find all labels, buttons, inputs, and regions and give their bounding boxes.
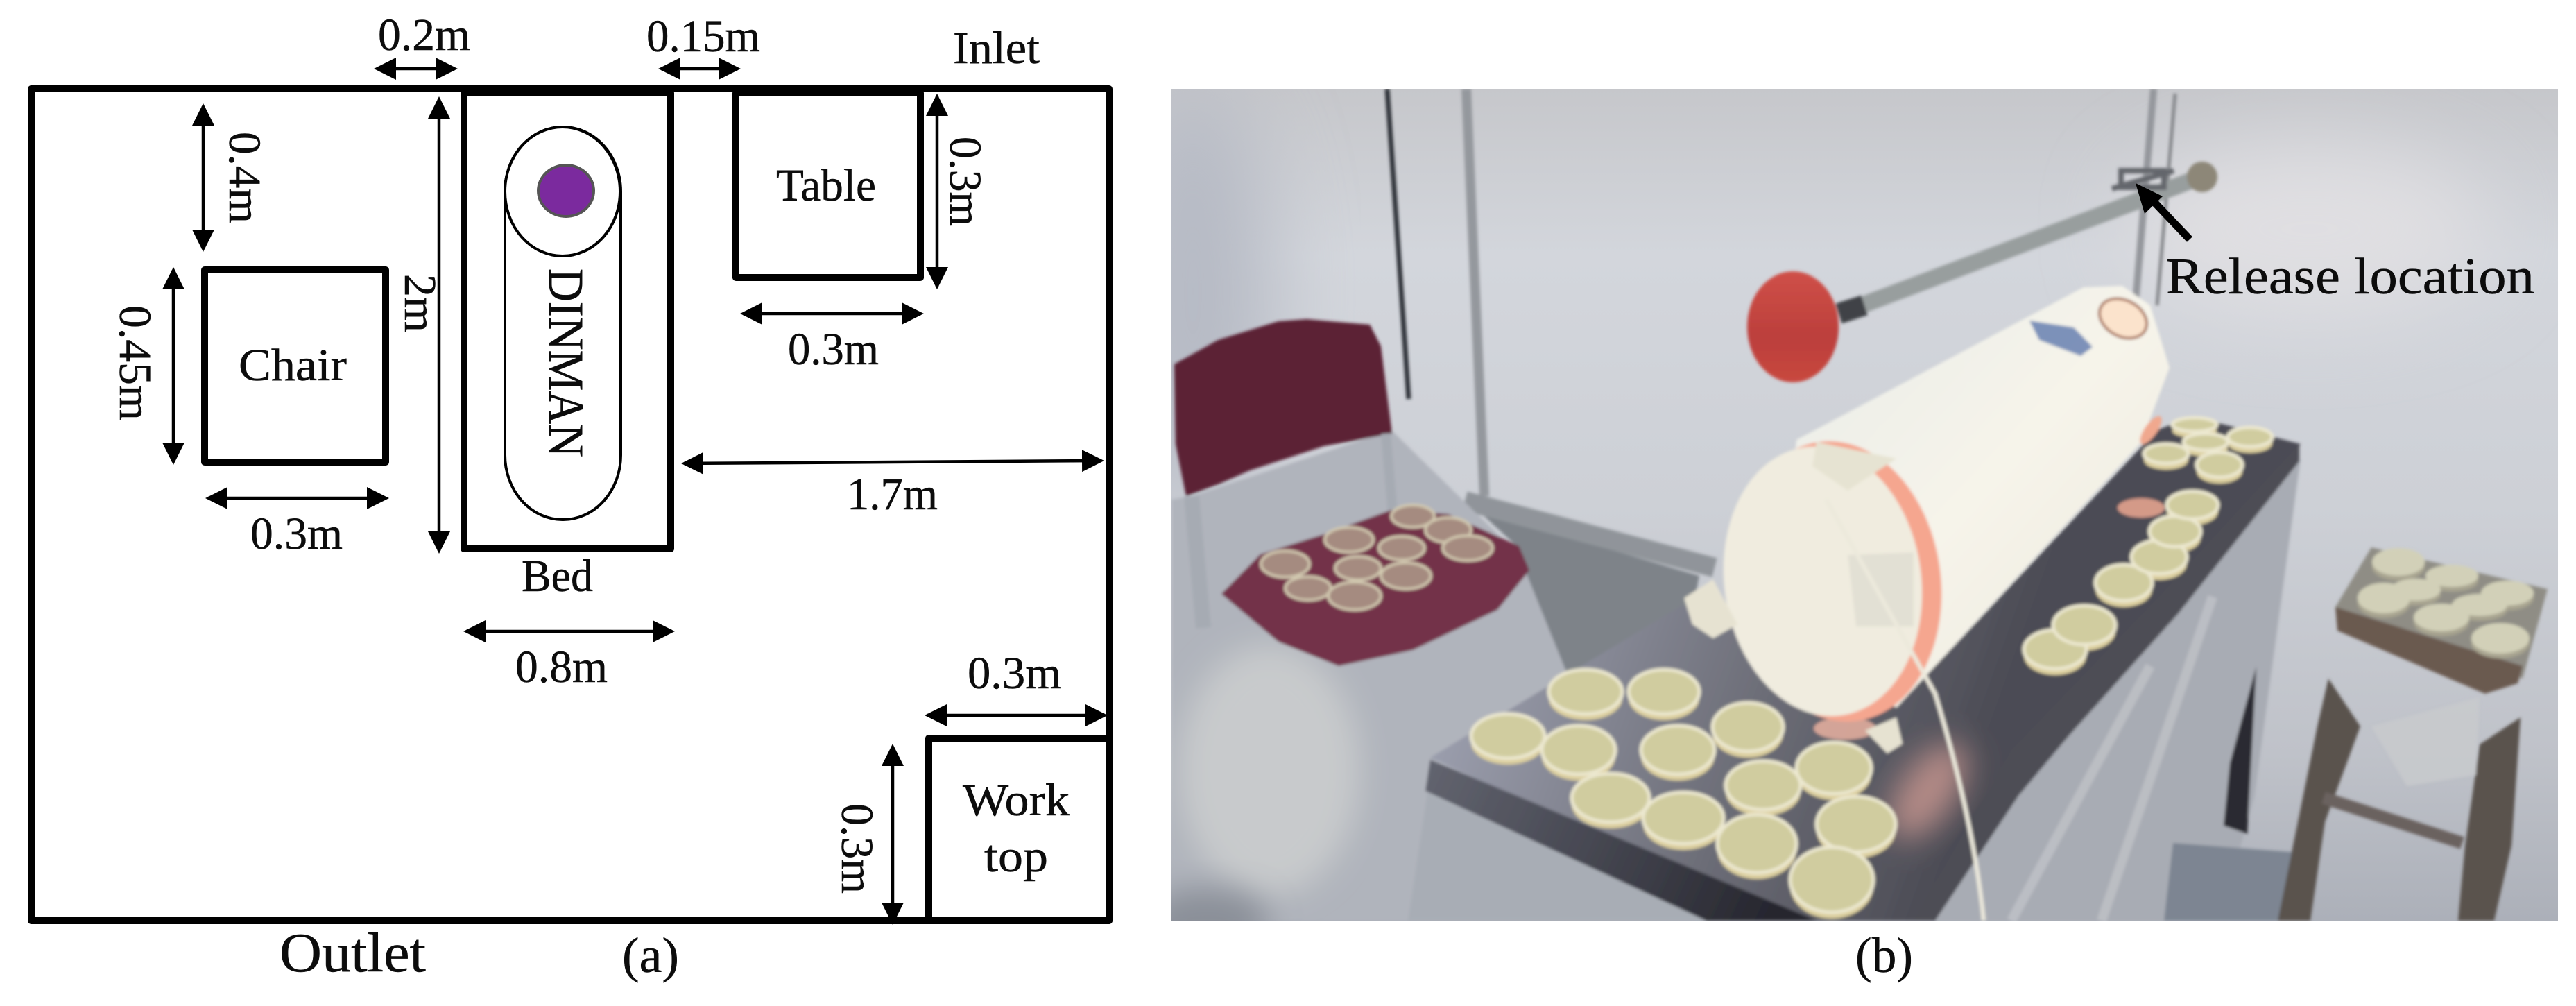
chair plastic cover [1171,429,1567,821]
label: dinman: DINMAN [538,268,594,457]
chair legs [1192,434,1393,628]
table front band [1425,760,1817,921]
tube end plate [1706,434,1939,729]
caption a: (a) [622,928,679,983]
chair seat [1221,510,1529,666]
release point marker [538,165,594,216]
dimension: 1.7m [684,461,1101,520]
tube junction box [1848,552,1914,626]
dimension: 0.15m: 0.15m [646,11,760,62]
lower right floor [2164,843,2310,921]
label: outlet: Outlet [280,923,426,984]
callout: release location: Release location [2166,248,2534,305]
plastic below table front [1408,792,1706,921]
cable [1826,500,1984,921]
release clamp [2112,171,2174,189]
tube glow ring [1717,427,1959,735]
chair [205,270,386,462]
callout: release location [2136,183,2534,305]
dimension: work top depth 0.3m: 0.3m [832,803,882,894]
right table edge band [1914,444,2299,921]
work top [929,738,1109,921]
dimension: table depth 0.3m: 0.3m [940,137,990,226]
main table surface [1430,416,2301,921]
stool dish bases [2358,553,2534,658]
petri dishes on stool [2358,548,2534,654]
work top: Work [963,775,1070,826]
tube top bracket [1812,442,1896,491]
red ball [1747,271,1839,382]
table dark leg [2224,667,2256,834]
arrow to release point [2136,183,2190,239]
right table plastic side [1900,458,2301,921]
label: inlet: Inlet [953,23,1040,74]
tube logo [2029,321,2093,356]
petri dish bases [1471,424,2272,919]
panel a: room floor plan [31,10,1109,984]
wall shade left [1171,103,1291,494]
bed [464,93,671,602]
wall mount [2187,162,2217,192]
work top: top [984,831,1048,882]
dimension: chair width 0.3m: 0.3m [250,509,343,559]
tube body [1776,286,2170,708]
right stool [2278,547,2548,921]
reflection on table [1814,498,2165,852]
chair plastic haze [1179,645,1359,895]
dimension: 0.4m: 0.4m [219,132,270,223]
dimension: table width 0.3m: 0.3m [788,324,879,375]
floor behind chair [1484,515,1701,672]
dimension: bed to wall 0.2m: 0.2m [378,10,470,60]
dimension: work top width 0.3m: 0.3m [968,648,1061,699]
table [736,93,920,278]
dinman manikin [505,127,621,520]
wall frame [1387,89,2175,496]
wall background [1171,89,2558,921]
petri dishes on main table [1471,418,2272,912]
table: Table [776,160,876,211]
tube side brackets [1684,579,1903,753]
plastic streaks [2011,597,2213,921]
dimension: 1.7m: 1.7m [847,469,938,520]
support arm [1839,180,2192,314]
petri dishes on chair [1261,505,1493,610]
wall highlight [2129,146,2490,312]
stool plastic [2371,697,2480,786]
label: bed: Bed [522,551,593,602]
chair: Chair [239,340,347,391]
caption b: (b) [1855,928,1913,983]
dimension: bed length 2m: 2m [395,274,445,332]
chair back [1174,319,1392,496]
frame base rail [1465,501,1715,568]
panel b: photograph of the setup [1117,83,2558,957]
tube windows [2093,291,2165,447]
dimension: chair 0.45m: 0.45m [110,305,160,420]
floor corner [1171,874,1278,921]
dimension: bed width 0.8m: 0.8m [515,642,608,692]
room outline [31,89,1109,921]
